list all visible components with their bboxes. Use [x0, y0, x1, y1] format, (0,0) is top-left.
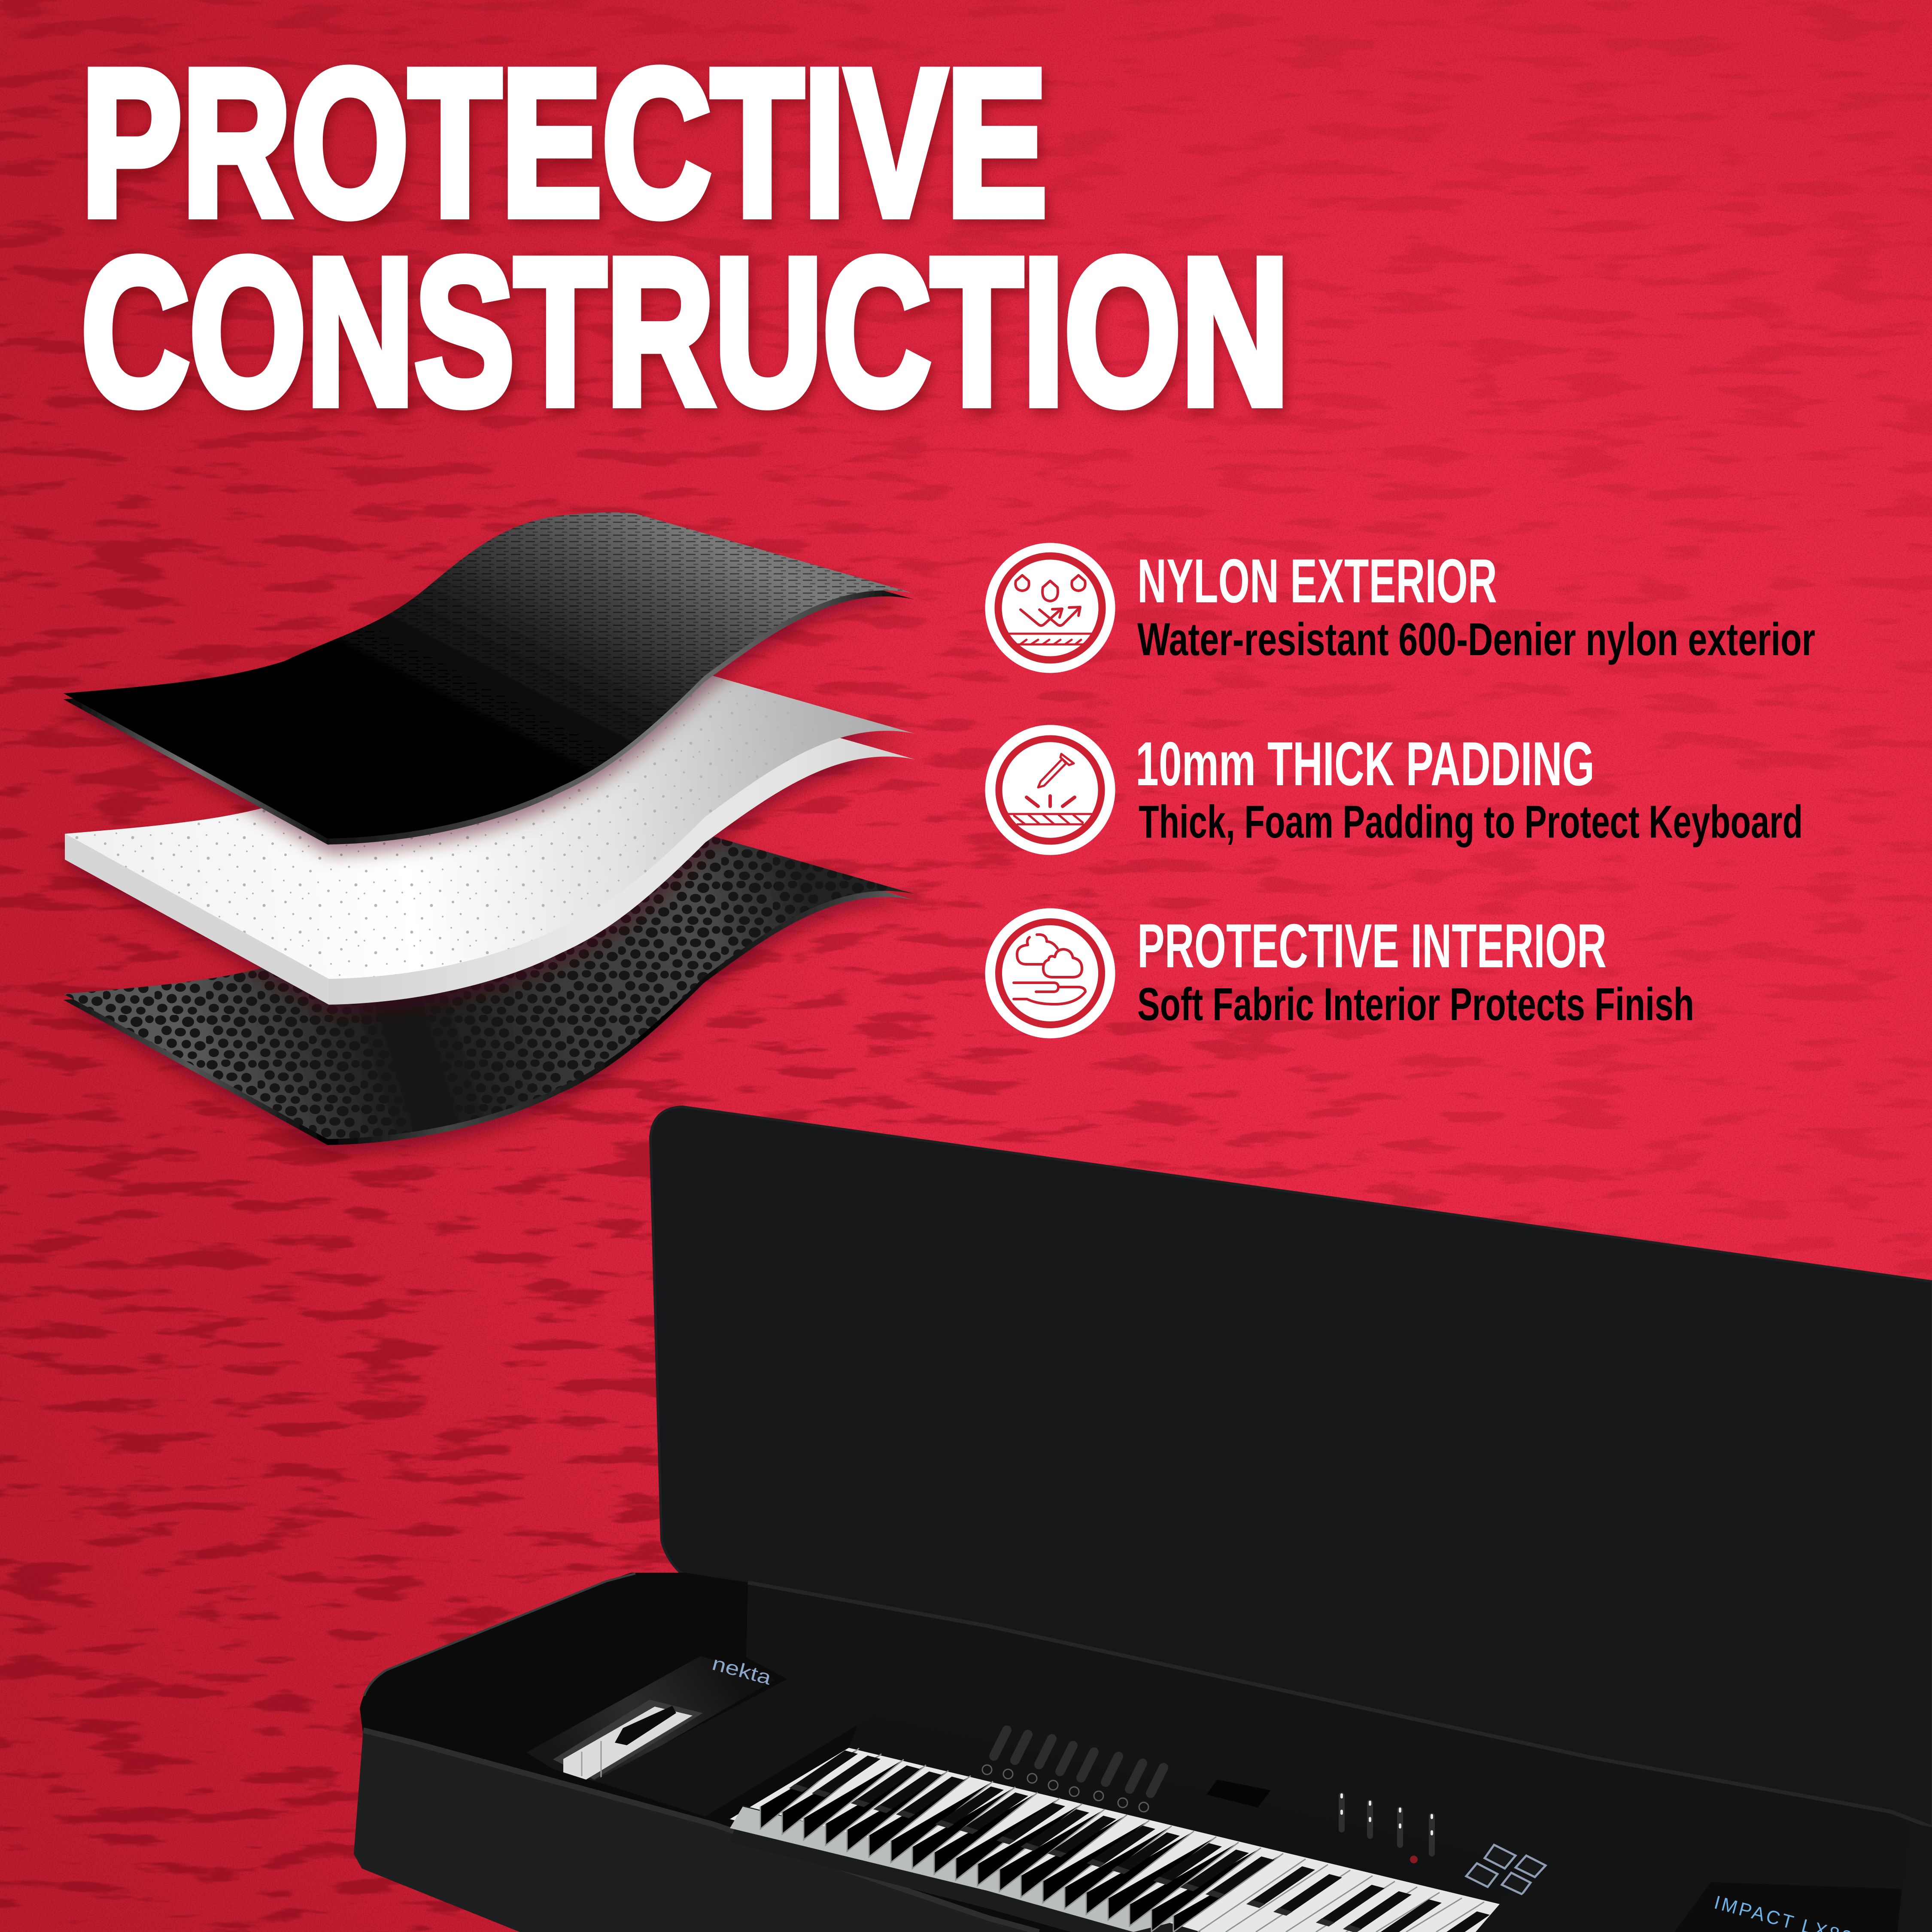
heading: 10mm THICK PADDING [1136, 729, 1595, 799]
title: CONSTRUCTION [81, 215, 1289, 448]
nekta logo: nekta [710, 1652, 774, 1689]
base front wall [354, 1730, 1039, 1932]
keyboard white keys [730, 1748, 1518, 1932]
bag base interior [354, 1573, 1932, 1932]
keyboard right end panel [1674, 1882, 1906, 1932]
feature: thick padding [985, 725, 1803, 855]
padded strap right [1476, 1805, 1699, 1932]
heading: NYLON EXTERIOR [1137, 546, 1497, 616]
icon: nail on padding [985, 725, 1115, 855]
heading: PROTECTIVE INTERIOR [1137, 911, 1607, 981]
keyboard control panel [849, 1713, 1546, 1904]
right strap [1897, 1823, 1932, 1932]
feature: nylon exterior [985, 543, 1815, 673]
padded strap left [594, 1656, 915, 1817]
title [81, 26, 1289, 448]
middle sheet: foam padding [65, 653, 915, 1005]
icon: clouds and hand [985, 908, 1115, 1038]
faders [982, 1730, 1163, 1812]
layer illustration: three material sheets [64, 512, 915, 1145]
keyboard left end panel [526, 1652, 775, 1782]
bottom sheet: textured interior [64, 813, 914, 1145]
zipper edge [364, 1574, 635, 1696]
front wall seam [363, 1730, 1039, 1932]
title: PROTECTIVE [81, 26, 1047, 259]
top sheet: nylon exterior [64, 512, 914, 844]
drum pads [1466, 1845, 1546, 1894]
keyboard gig bag [354, 1107, 1932, 1932]
feature: protective interior [985, 908, 1694, 1038]
icon: water resistant [985, 543, 1115, 673]
key separators [760, 1748, 1484, 1932]
lid seam [748, 1583, 1932, 1827]
record button [1410, 1856, 1418, 1863]
black keys [789, 1750, 1518, 1932]
back wall of interior [746, 1583, 1932, 1932]
bag lid [650, 1107, 1932, 1889]
description: Soft Fabric Interior Protects Finish [1137, 978, 1694, 1030]
display screen [1206, 1780, 1271, 1807]
vertical sliders [1342, 1795, 1432, 1853]
